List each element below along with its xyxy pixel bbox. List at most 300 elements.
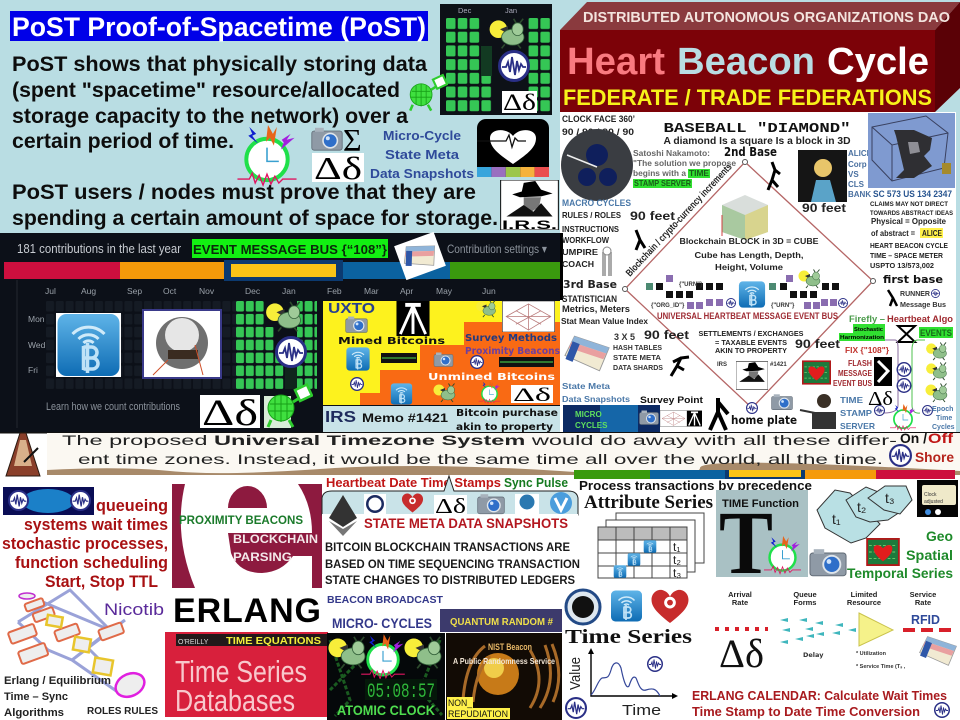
flowchart xyxy=(8,590,148,701)
text block: third base stats: STATISTICIAN xyxy=(562,294,617,304)
label: second base: 2nd Base xyxy=(724,145,777,159)
delta delta symbol: Δδ xyxy=(719,631,764,676)
heading: heart beacon cycle: Beacon xyxy=(677,41,815,83)
atomic clock image xyxy=(327,633,445,720)
IRS memo and heart tile: #1421 xyxy=(770,362,787,368)
text block: hash tables xyxy=(613,332,663,372)
sigma and delta symbols xyxy=(312,122,364,186)
clock and epoch cycles: Cycles xyxy=(932,424,955,431)
electric meter xyxy=(143,310,221,378)
text block: blockchain block cube xyxy=(680,236,819,272)
heading: heart beacon cycle: Heart xyxy=(567,41,665,83)
label: ninety feet: 90 feet xyxy=(630,209,675,223)
text block: macro cycles rules: UMPIRE xyxy=(562,247,598,257)
text block: geo spatial temporal series: Geo xyxy=(926,528,953,544)
month labels: Mar xyxy=(364,286,379,296)
month labels: Jul xyxy=(45,286,56,296)
heading: baseball diamond: A diamond Is a square Is a block in 3D xyxy=(664,135,851,147)
month labels xyxy=(45,286,496,296)
Alice portrait xyxy=(798,150,847,202)
icon: runner at second xyxy=(768,162,780,190)
text block: flash message event bus xyxy=(833,346,889,388)
delta delta symbol: Δδ xyxy=(202,393,258,434)
label: blockchain parsing: PARSING xyxy=(233,550,292,564)
icon: heartbeat clock xyxy=(237,125,297,185)
spatial blobs t1 t2 t3: t₃ xyxy=(885,490,895,506)
icon: wave pulse xyxy=(890,445,911,466)
home plate icons xyxy=(747,394,836,429)
clock and epoch cycles xyxy=(875,404,955,431)
label: survey point: Survey Point xyxy=(640,395,704,406)
heading: heartbeat date time stamps: Sync Pulse xyxy=(504,475,568,490)
text block: PoST users: spending a certain amount of space for storage. xyxy=(12,207,498,230)
icon: index cards xyxy=(920,637,956,665)
limited resource triangle xyxy=(859,613,893,646)
text block: time stamp server: SERVER xyxy=(840,421,875,431)
heading: heartbeat date time stamps: Heartbeat Date Time Stamps xyxy=(326,475,501,490)
panel: mined and unmined bitcoins: Proximity Beacons xyxy=(465,346,560,357)
icon: heart tile xyxy=(867,539,899,565)
panel: IRS memo 1421 xyxy=(323,406,560,433)
axis labels: Value xyxy=(567,657,584,690)
wordmark: Erlang: ERLANG xyxy=(173,592,321,630)
label: contribution settings: Contribution settings ▾ xyxy=(447,242,547,256)
subheading: federate trade federations: FEDERATE / TRADE FEDERATIONS xyxy=(563,85,932,110)
wave strip xyxy=(3,487,94,515)
event bus message row: {"URN"} xyxy=(771,303,795,309)
month labels: Dec xyxy=(245,286,261,296)
text block: third base stats: Metrics, Meters xyxy=(562,304,630,314)
month labels: Sep xyxy=(127,286,142,296)
text block: state meta data snapshots: Data Snapshots xyxy=(562,394,630,404)
queue column labels: Service xyxy=(910,590,936,599)
text block: flash message event bus: FIX {"108"} xyxy=(845,346,889,355)
text block: queueing systems: stochastic processes, xyxy=(2,535,168,553)
text block: third base stats xyxy=(561,278,649,326)
panel: mined and unmined bitcoins: UXTO xyxy=(328,300,375,317)
text block: universal timezone system xyxy=(62,432,898,467)
text block: bitcoin blockchain transactions: BASED ON TIME SEQUENCING TRANSACTION xyxy=(325,557,580,571)
text block: first base: first base xyxy=(883,273,943,286)
text block: Alice corp vs CLS bank: CLS xyxy=(848,180,865,189)
heading: baseball diamond xyxy=(664,121,851,147)
label: delay: Delay xyxy=(803,651,824,659)
text block: PoST definition xyxy=(12,53,427,153)
text block: Satoshi quote: STAMP SERVER xyxy=(634,178,691,188)
NIST beacon image: REPUDIATION xyxy=(448,709,508,719)
text block: universal timezone system: The proposed Universal Timezone System would do away with all these differ- xyxy=(62,432,898,448)
atomic clock image: 05:08:57 xyxy=(367,681,435,704)
icon: IRS agent: I.R.S. xyxy=(502,218,557,232)
queue column labels: Resource xyxy=(847,598,881,607)
spatial blobs t1 t2 t3 xyxy=(817,486,912,543)
panel: mined and unmined bitcoins xyxy=(323,300,560,406)
calendar panel with firefly: Δδ xyxy=(503,90,536,115)
text block: micro-cycle state meta data snapshots: Data Snapshots xyxy=(370,166,474,181)
panel: baseball diamond xyxy=(560,112,960,432)
text block: firefly heartbeat algo: Firefly – xyxy=(849,314,885,324)
panel: queue diagram xyxy=(692,590,956,719)
clock and epoch cycles: Time xyxy=(936,415,952,422)
icon: bitcoin beacon tile xyxy=(56,313,121,377)
text block: Erlang calendar xyxy=(692,688,947,719)
label: Nicotib: Nicotib xyxy=(104,600,164,619)
diagonal label: blockchain increments: Blockchain / crypto-currency increments xyxy=(624,162,735,279)
icon: runner at third xyxy=(671,357,689,376)
text block: queueing systems: function scheduling xyxy=(15,554,168,572)
icons: wave pulses xyxy=(566,657,662,718)
text block: hash tables: DATA SHARDS xyxy=(613,363,663,372)
panel: DAO heart beacon cycle banner: DISTRIBUTED AUTONOMOUS ORGANIZATIONS DAO xyxy=(583,9,950,26)
panel: IRS memo 1421: Memo #1421 xyxy=(362,411,448,425)
text block: time stamp server: STAMP xyxy=(840,408,872,418)
service dashes xyxy=(903,628,956,632)
heading: baseball diamond: BASEBALL "DIAMOND" xyxy=(664,121,850,137)
text block: patent claims: SC 573 US 134 2347 xyxy=(873,189,952,199)
attribute table: t₃ xyxy=(673,566,681,580)
clock face gauge: CLOCK FACE 360’ xyxy=(562,114,635,124)
text block: firefly heartbeat algo: Heartbeat Algo xyxy=(887,314,954,324)
spatial blobs t1 t2 t3: t₂ xyxy=(857,499,866,515)
heading: heart beacon cycle: Cycle xyxy=(827,41,929,83)
atomic clock image: ATOMIC CLOCK xyxy=(337,703,435,718)
icon row with brace xyxy=(322,476,578,536)
book: time series databases xyxy=(165,632,328,718)
panel: mined and unmined bitcoins: Unmined Bitcoins xyxy=(428,372,555,383)
text block: flash message event bus: FLASH xyxy=(848,359,872,368)
text block: Satoshi quote xyxy=(633,148,736,188)
calendar panel with firefly: Jan xyxy=(505,6,517,15)
time function image: T xyxy=(719,494,773,593)
event bus message row xyxy=(646,270,848,309)
clock face gauge xyxy=(561,114,635,201)
text block: geo spatial temporal series xyxy=(847,528,953,581)
micro cycles strip: MICRO xyxy=(575,410,602,419)
text block: Erlang equilibrium xyxy=(4,675,158,719)
heading: attribute series: Attribute Series xyxy=(584,492,713,513)
text block: Erlang equilibrium: ROLES RULES xyxy=(87,705,158,717)
clock and epoch cycles: Epoch xyxy=(932,406,953,413)
heading: contributions count: 181 contributions in the last year xyxy=(17,241,182,256)
icon: camera xyxy=(810,549,846,576)
icon: wave pulse xyxy=(276,338,306,366)
icon: firefly xyxy=(266,302,300,331)
text block: PoST definition: PoST shows that physically storing data xyxy=(12,53,427,76)
NIST beacon image: A Public Randomness Service xyxy=(453,656,555,666)
bitcoin cube image xyxy=(868,113,955,188)
icon: hash table cards xyxy=(565,336,609,371)
label: on off shore xyxy=(900,430,954,465)
text block: state meta data snapshots: State Meta xyxy=(562,381,610,391)
axis labels xyxy=(567,657,661,719)
text block: patent claims: USPTO 13/573,002 xyxy=(870,261,934,270)
icon: camera xyxy=(312,128,342,150)
sigma and delta symbols: Δδ xyxy=(314,150,362,186)
NIST beacon image: NON_ xyxy=(448,698,473,708)
label: RFID: RFID xyxy=(911,612,940,627)
text block: Alice corp vs CLS bank: BANK xyxy=(848,190,871,199)
panel: GitHub contributions xyxy=(0,232,560,434)
text block: hash tables: 3 X 5 xyxy=(614,332,635,342)
text block: Alice corp vs CLS bank: ALICE xyxy=(848,149,873,158)
text block: bitcoin blockchain transactions: BITCOIN BLOCKCHAIN TRANSACTIONS ARE xyxy=(325,540,570,554)
queue column labels: Rate xyxy=(732,598,748,607)
text block: time stamp server: TIME xyxy=(840,395,863,405)
text block: patent claims: TOWARDS ABSTRACT IDEAS xyxy=(870,210,954,217)
panel: IRS memo 1421: IRS xyxy=(325,409,356,426)
icon: metronome xyxy=(6,433,40,476)
panel: universal timezone banner xyxy=(0,430,960,477)
spatial blobs t1 t2 t3: t₁ xyxy=(832,511,841,527)
utilization notes: * Service Time (Tₛ , xyxy=(856,664,906,670)
text block: macro cycles rules: WORKFLOW xyxy=(562,235,610,245)
text block: Alice corp vs CLS bank xyxy=(848,149,873,199)
label: home plate: home plate xyxy=(731,413,797,427)
panel: DAO heart beacon cycle banner xyxy=(560,0,960,112)
text block: Satoshi quote: begins with a xyxy=(633,168,686,178)
queue column labels: Rate xyxy=(915,598,931,607)
queue column labels: Queue xyxy=(793,590,817,599)
label: ninety feet: 90 feet xyxy=(802,201,846,215)
panel: mined and unmined bitcoins: Δδ xyxy=(513,385,551,406)
icon: wave pulse xyxy=(935,703,949,717)
label: blockchain parsing: BLOCKCHAIN xyxy=(233,532,318,546)
text block: queueing systems: queueing xyxy=(96,497,168,515)
text block: geo spatial temporal series: Temporal Series xyxy=(847,565,953,581)
label: event message bus: EVENT MESSAGE BUS {“108”} xyxy=(193,242,387,257)
event bus message row: {"ORG_ID"} xyxy=(651,303,685,309)
book: time series databases: TIME EQUATIONS xyxy=(226,636,321,647)
queue column labels: Limited xyxy=(851,590,878,599)
time function image xyxy=(716,490,808,593)
text block: Erlang equilibrium: Algorithms xyxy=(4,707,64,719)
text block: PoST definition: (spent "spacetime" resource/allocated xyxy=(12,79,400,102)
text block: Satoshi quote: "The solution we propose xyxy=(633,158,736,168)
text block: Satoshi quote: TIME xyxy=(689,168,709,178)
panel: attribute series xyxy=(579,478,958,593)
icon: 3D blockchain cube xyxy=(722,195,768,240)
calendar panel with firefly xyxy=(440,4,552,115)
month labels: Feb xyxy=(327,286,342,296)
utilization notes: * Utilization xyxy=(856,651,887,657)
text block: state meta data snapshots xyxy=(562,381,630,404)
month labels: Apr xyxy=(400,286,413,296)
text block: settlements: SETTLEMENTS / EXCHANGES xyxy=(698,329,804,338)
text block: bitcoin blockchain transactions xyxy=(325,540,580,587)
icon: batter xyxy=(710,398,728,430)
label: learn how: Learn how we count contributions xyxy=(46,401,180,413)
axis labels: Time xyxy=(622,702,661,719)
text block: hash tables: HASH TABLES xyxy=(613,343,662,352)
text block: settlements: = TAXABLE EVENTS xyxy=(715,338,787,347)
text block: blockchain block cube: Cube has Length, Depth, xyxy=(694,250,804,260)
label: on off shore: Shore xyxy=(915,449,954,465)
text block: Erlang equilibrium: Time – Sync xyxy=(4,691,68,703)
book: time series databases: Databases xyxy=(175,683,295,718)
panel: IRS memo 1421: akin to property xyxy=(456,422,554,433)
text block: queueing systems xyxy=(2,497,168,591)
panel: state meta data snapshots xyxy=(322,475,580,720)
panel: mined and unmined bitcoins: Mined Bitcoins xyxy=(338,336,445,347)
clock adjusted notification xyxy=(917,480,958,517)
weekday labels: Fri xyxy=(28,365,38,375)
text block: first base: RUNNER xyxy=(900,291,930,298)
text block: firefly heartbeat algo xyxy=(839,314,954,342)
heading: heart beacon cycle xyxy=(567,41,929,83)
panel: mined and unmined bitcoins: Survey Methods xyxy=(465,333,557,344)
title: PoST Proof-of-Spacetime: PoST Proof-of-Spacetime (PoST) xyxy=(12,12,426,42)
panel: IRS memo 1421: Bitcoin purchase xyxy=(456,408,558,419)
label: ninety feet: 90 feet xyxy=(644,328,689,342)
text block: hash tables: STATE META xyxy=(613,353,662,362)
clock adjusted notification: adjusted xyxy=(924,499,943,505)
NIST beacon image xyxy=(446,633,562,720)
weekday labels xyxy=(28,314,46,375)
weekday labels: Mon xyxy=(28,314,45,324)
text block: geo spatial temporal series: Spatial xyxy=(906,547,953,563)
label: on off shore: On / xyxy=(900,430,927,446)
text block: first base xyxy=(883,273,946,309)
text block: third base stats: 3rd Base xyxy=(563,278,617,291)
text block: time stamp server xyxy=(840,395,875,431)
icon: IRS agent xyxy=(501,180,558,232)
sigma and delta symbols: Σ xyxy=(343,122,362,158)
label: universal heartbeat message event bus: UNIVERSAL HEARTBEAT MESSAGE EVENT BUS xyxy=(657,311,838,321)
label: micro-cycles: MICRO- CYCLES xyxy=(332,616,432,631)
month labels: Aug xyxy=(81,286,96,296)
text block: Erlang calendar: Time Stamp to Date Time Conversion xyxy=(692,704,920,719)
attribute table: t₂ xyxy=(673,553,681,567)
text block: flash message event bus: EVENT BUS xyxy=(833,379,873,388)
text block: Erlang equilibrium: Erlang / Equilibrium xyxy=(4,675,111,687)
contribution grid xyxy=(46,301,317,389)
IRS memo and heart tile: IRS xyxy=(717,362,727,368)
attribute table xyxy=(598,513,704,580)
time function image: TIME Function xyxy=(722,498,799,510)
text block: bitcoin blockchain transactions: STATE CHANGES TO DISTRIBUTED LEDGERS xyxy=(325,573,575,587)
text block: Satoshi quote: Satoshi Nakamoto: xyxy=(633,148,710,158)
delta delta symbol xyxy=(200,393,260,434)
NIST beacon image: NIST Beacon xyxy=(488,642,532,652)
clock face gauge: 90 / 90 / 90 / 90 xyxy=(562,127,634,137)
text block: flash message event bus: MESSAGE xyxy=(838,369,873,378)
text block: patent claims: Physical = Opposite xyxy=(871,217,947,226)
text block: queueing systems: Start, Stop TTL xyxy=(45,573,158,591)
event bus message row: {"URN"} xyxy=(679,282,703,288)
label: beacon broadcast: BEACON BROADCAST xyxy=(327,594,444,606)
icon: turtle with document xyxy=(410,75,447,111)
text block: macro cycles rules xyxy=(562,198,631,269)
text block: blockchain block cube: Height, Volume xyxy=(715,262,783,272)
label: ninety feet: 90 feet xyxy=(795,337,840,351)
book: time series databases: Time Series xyxy=(175,654,307,689)
utilization notes xyxy=(856,651,906,670)
weekday labels: Wed xyxy=(28,340,46,350)
panel: PoST proof of spacetime xyxy=(0,0,560,233)
arrival dashes xyxy=(715,627,768,631)
icon row with brace: Δδ xyxy=(435,494,466,518)
text block: patent claims: HEART BEACON CYCLE xyxy=(870,241,948,250)
label: blockchain parsing xyxy=(233,532,318,564)
text block: micro-cycle state meta data snapshots: Micro-Cycle xyxy=(383,128,461,143)
text block: third base stats: Stat Mean Value Index xyxy=(561,317,649,326)
label: quantum random xyxy=(440,609,562,632)
month labels: May xyxy=(436,286,453,296)
calendar panel with firefly: Dec xyxy=(458,6,472,15)
month labels: Nov xyxy=(199,286,215,296)
Erlang logo xyxy=(172,484,322,630)
text block: micro-cycle state meta data snapshots xyxy=(370,128,474,181)
text block: patent claims: CLAIMS MAY NOT DIRECT xyxy=(870,201,948,208)
text block: first base: Message Bus xyxy=(900,302,946,309)
text block: Alice corp vs CLS bank: VS xyxy=(848,170,859,179)
text block: patent claims: of abstract = xyxy=(871,229,915,238)
text block: patent claims: TIME – SPACE METER xyxy=(870,251,944,260)
heading: time series: Time Series xyxy=(565,626,692,648)
text block: patent claims xyxy=(870,189,954,270)
firefly event chain xyxy=(868,340,947,413)
colored bar: lower right xyxy=(574,470,955,479)
clock adjusted notification: Clock xyxy=(924,492,937,498)
label: proximity beacons: PROXIMITY BEACONS xyxy=(179,515,303,527)
queue column labels: Arrival xyxy=(728,590,752,599)
heading: process transactions: Process transactions by precedence xyxy=(579,478,812,493)
panel: queueing systems xyxy=(2,487,168,719)
text block: PoST users xyxy=(12,181,498,230)
text block: firefly heartbeat algo: Stochastic xyxy=(854,327,883,333)
icon: turtle xyxy=(264,385,312,428)
axis and curve xyxy=(588,648,678,699)
micro cycles strip xyxy=(563,405,702,432)
icon: rotated index cards xyxy=(394,232,446,280)
label: on off shore: Off xyxy=(928,430,953,446)
text block: micro-cycle state meta data snapshots: State Meta xyxy=(385,147,460,162)
book: time series databases: O'REILLY xyxy=(178,639,209,646)
firefly event chain: Δδ xyxy=(868,388,893,410)
text block: Alice corp vs CLS bank: Corp xyxy=(848,160,867,169)
month labels: Jan xyxy=(282,286,296,296)
text block: queueing systems: systems wait times xyxy=(24,516,168,534)
icon: umpire and runner xyxy=(603,230,645,276)
month labels: Oct xyxy=(163,286,177,296)
text block: blockchain block cube: Blockchain BLOCK in 3D = CUBE xyxy=(680,236,819,246)
queue column labels xyxy=(728,590,936,607)
row of bitcoin icons xyxy=(566,590,688,624)
text block: macro cycles rules: INSTRUCTIONS xyxy=(562,224,619,234)
text block: PoST definition: storage capacity to the network) over a xyxy=(12,105,408,128)
panel: time series chart xyxy=(565,626,692,719)
label: ninety feet xyxy=(630,201,846,351)
text block: patent claims: ALICE xyxy=(922,229,943,238)
text block: universal timezone system: ent time zones. Instead, it would be the same time all over the world, all the time. xyxy=(78,451,883,467)
text block: Erlang calendar: ERLANG CALENDAR: Calculate Wait Times xyxy=(692,688,947,703)
micro cycles strip: CYCLES xyxy=(575,421,608,430)
text block: PoST users: PoST users / nodes must prove that they are xyxy=(12,181,476,204)
queue fish xyxy=(780,618,856,644)
month labels: Jun xyxy=(482,286,496,296)
text block: macro cycles rules: MACRO CYCLES xyxy=(562,198,631,208)
text block: settlements: AKIN TO PROPERTY xyxy=(715,346,787,355)
queue column labels: Forms xyxy=(794,598,816,607)
label: state meta data snapshots: STATE META DATA SNAPSHOTS xyxy=(364,516,568,531)
text block: firefly heartbeat algo: Harmonization xyxy=(840,335,885,341)
text block: settlements xyxy=(698,329,804,355)
attribute table: t₁ xyxy=(673,540,680,554)
text block: macro cycles rules: COACH xyxy=(562,259,594,269)
rainbow bar xyxy=(4,260,560,281)
diamond outline xyxy=(625,162,873,408)
text block: PoST definition: certain period of time. xyxy=(12,130,234,153)
